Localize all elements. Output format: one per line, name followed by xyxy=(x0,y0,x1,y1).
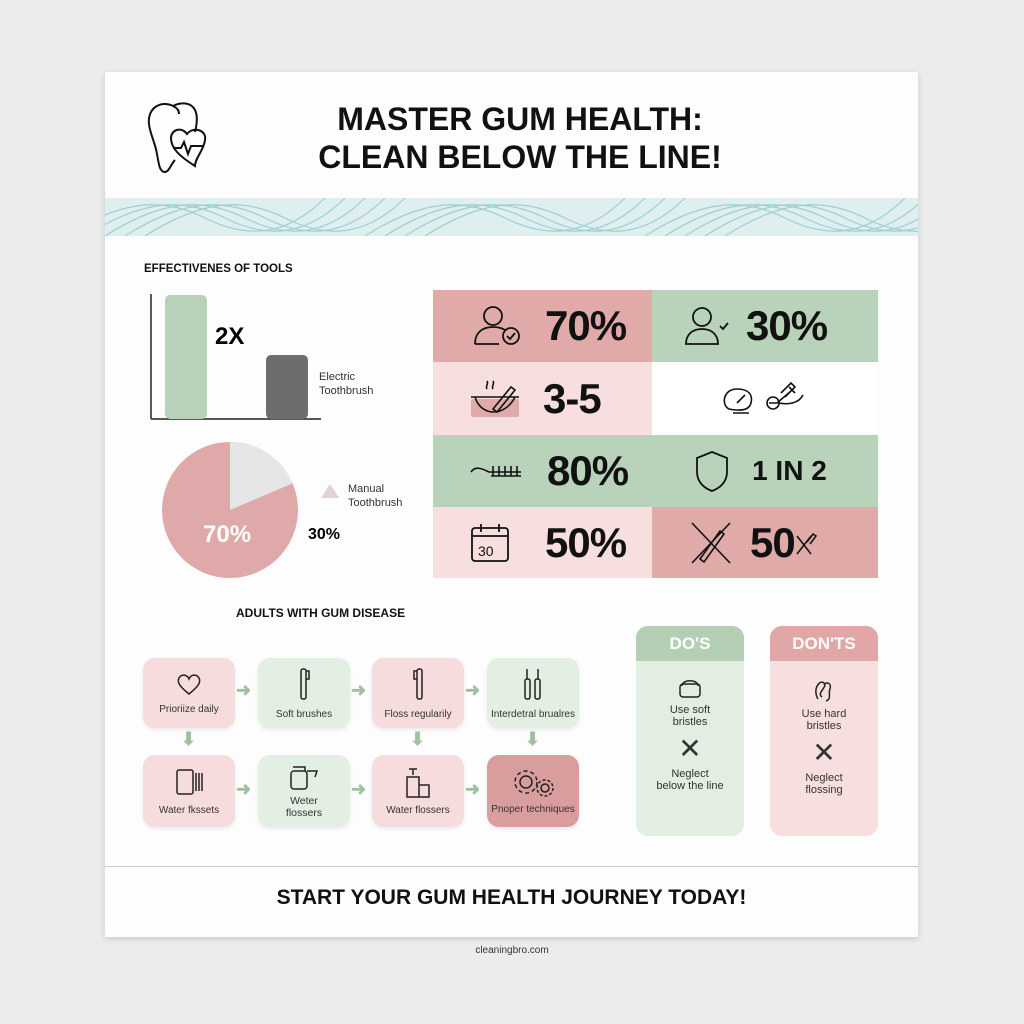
title: MASTER GUM HEALTH: xyxy=(337,101,703,137)
bar chart: Toothbrush xyxy=(319,385,373,397)
stat: 80% xyxy=(433,435,878,507)
stat: 50%: 30 xyxy=(478,542,494,558)
flow chart: ➜ xyxy=(465,680,480,700)
bar chart xyxy=(150,294,373,420)
footer call to action: START YOUR GUM HEALTH JOURNEY TODAY! xyxy=(277,886,746,909)
step: proper techniques: Pnoper techniques xyxy=(491,804,575,814)
panel: don'ts: flossing xyxy=(805,784,843,796)
panel: do's: Neglect xyxy=(671,768,709,780)
bar chart: Electric xyxy=(319,371,356,383)
stat: 70%: 70% xyxy=(545,302,626,349)
flow chart: ➜ xyxy=(351,680,366,700)
step: floss regularly: Floss regularily xyxy=(384,708,452,720)
step: water flossers 2 xyxy=(372,755,464,827)
step: water flossers: Weter xyxy=(290,795,318,807)
pie chart: 30% xyxy=(308,526,340,543)
flow chart: ➜ xyxy=(465,779,480,799)
panel: do's: ✕ xyxy=(678,733,702,764)
stat: 50x: 50 xyxy=(750,518,795,566)
panel: don'ts: Neglect xyxy=(805,772,843,784)
step: water flossers 2: Water flossers xyxy=(386,804,450,816)
step: proper techniques xyxy=(487,755,579,827)
stat: 50% xyxy=(433,507,652,578)
stat: 80%: 1 IN 2 xyxy=(752,455,827,486)
step: soft brushes xyxy=(258,658,350,728)
panel: do's: DO'S xyxy=(670,634,710,653)
card background xyxy=(105,72,918,937)
decorative wave band xyxy=(105,198,918,236)
panel: do's xyxy=(636,626,744,836)
panel: don'ts xyxy=(770,626,878,836)
panel: do's: bristles xyxy=(673,716,707,728)
flow chart: ⬇ xyxy=(525,729,540,749)
arrows: ➜ xyxy=(236,680,251,700)
panel: don'ts: bristles xyxy=(807,720,841,732)
bar chart: 2X xyxy=(215,323,244,350)
stat: 70% xyxy=(433,290,652,362)
panel: don'ts: Use hard xyxy=(802,708,846,720)
panel: do's: Use soft xyxy=(670,704,710,716)
step: floss regularly xyxy=(372,658,464,728)
panel: do's: below the line xyxy=(656,780,724,792)
stat: 50x xyxy=(652,507,878,578)
step: prioritize daily: Prioriize daily xyxy=(159,704,219,714)
step: water flossers: flossers xyxy=(286,807,322,819)
title xyxy=(318,101,722,175)
icon: tooth with heart xyxy=(148,102,206,173)
stat: 3-5: 3-5 xyxy=(543,374,601,422)
stat: 30%: 30% xyxy=(746,302,827,349)
step: prioritize daily xyxy=(143,658,235,728)
stat: 80%: 80% xyxy=(547,447,628,494)
panel: don'ts: ✕ xyxy=(812,737,836,768)
step: water flossets xyxy=(143,755,235,827)
step: interdental brushes xyxy=(487,658,579,728)
step: soft brushes: Soft brushes xyxy=(276,708,332,720)
source url: cleaningbro.com xyxy=(475,945,549,956)
flow chart: ⬇ xyxy=(410,729,425,749)
section heading: effectiveness: EFFECTIVENES OF TOOLS xyxy=(144,263,293,275)
pie chart: Manual xyxy=(348,483,384,495)
pie chart xyxy=(162,442,402,578)
pie chart: Toothbrush xyxy=(348,497,402,509)
flow chart: ➜ xyxy=(351,779,366,799)
step: water flossets: Water fkssets xyxy=(159,804,219,816)
stats grid xyxy=(433,290,878,578)
flow chart: ⬇ xyxy=(181,729,196,749)
flow chart xyxy=(142,658,580,830)
flow chart: ➜ xyxy=(236,779,251,799)
step: water flossers xyxy=(258,755,350,827)
divider xyxy=(105,866,918,867)
section heading: adults with gum disease: ADULTS WITH GUM DISEASE xyxy=(236,606,405,620)
icon: floss xyxy=(652,362,878,435)
step: interdental brushes: Interdetral brualres xyxy=(491,708,575,720)
pie chart: 70% xyxy=(203,521,251,548)
stat: 50%: 50% xyxy=(545,518,626,566)
stat: 3-5 xyxy=(433,362,652,435)
panel: don'ts: DON'TS xyxy=(792,634,856,653)
stat: 30% xyxy=(652,290,878,362)
title: CLEAN BELOW THE LINE! xyxy=(318,139,722,175)
